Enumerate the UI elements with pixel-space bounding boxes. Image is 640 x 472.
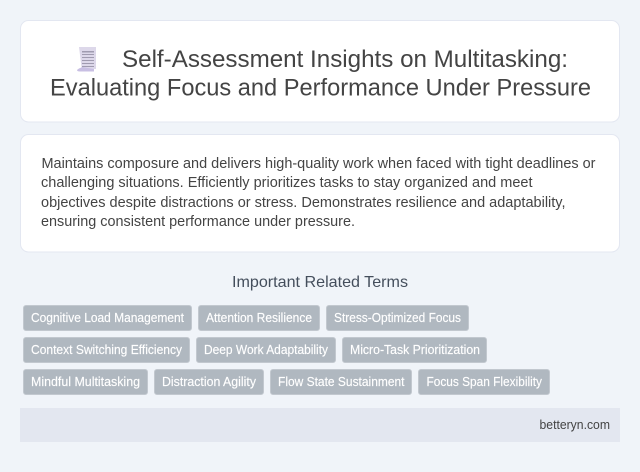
tag: Cognitive Load Management — [24, 306, 192, 330]
icon: document scroll — [77, 47, 96, 72]
tag: Attention Resilience: Attention Resilience — [206, 311, 312, 325]
description text: ensuring consistent performance under pressure. — [41, 214, 355, 230]
title: Self-Assessment Insights on Multitasking: — [122, 46, 568, 73]
tag: Flow State Sustainment — [270, 370, 412, 394]
tag: Distraction Agility: Distraction Agility — [162, 375, 257, 389]
footer bar — [20, 408, 620, 442]
tag: Stress-Optimized Focus — [326, 306, 468, 330]
description text — [41, 156, 596, 230]
tag group: related terms — [24, 306, 550, 394]
panel: description card — [20, 134, 620, 252]
tag: Focus Span Flexibility: Focus Span Flexibility — [426, 375, 543, 389]
tag: Mindful Multitasking — [24, 370, 148, 394]
footer source text: betteryn.com — [540, 418, 610, 432]
tag: Flow State Sustainment: Flow State Sustainment — [278, 375, 405, 389]
tag: Deep Work Adaptability — [196, 338, 336, 362]
panel: title card — [20, 20, 620, 122]
description text: challenging situations. Efficiently prioritizes tasks to stay organized and meet — [41, 175, 532, 191]
tag: Cognitive Load Management: Cognitive Load Management — [31, 311, 185, 325]
tag: Mindful Multitasking: Mindful Multitasking — [31, 375, 140, 389]
tag: Micro-Task Prioritization: Micro-Task Prioritization — [350, 343, 480, 357]
description text: objectives despite distractions or stress. Demonstrates resilience and adaptability, — [41, 195, 566, 211]
tag: Stress-Optimized Focus: Stress-Optimized Focus — [334, 311, 461, 325]
tag: Context Switching Efficiency: Context Switching Efficiency — [31, 343, 183, 357]
heading: important related terms: Important Related Terms — [232, 274, 408, 291]
title — [50, 46, 591, 102]
tag: Distraction Agility — [154, 370, 264, 394]
tag: Deep Work Adaptability: Deep Work Adaptability — [204, 343, 329, 357]
description text: Maintains composure and delivers high-quality work when faced with tight deadlines or — [42, 156, 596, 172]
tag: Micro-Task Prioritization — [342, 338, 486, 362]
tag: Context Switching Efficiency — [24, 338, 190, 362]
tag: Focus Span Flexibility — [418, 370, 550, 394]
tag: Attention Resilience — [198, 306, 320, 330]
title: Evaluating Focus and Performance Under Pressure — [50, 74, 591, 102]
